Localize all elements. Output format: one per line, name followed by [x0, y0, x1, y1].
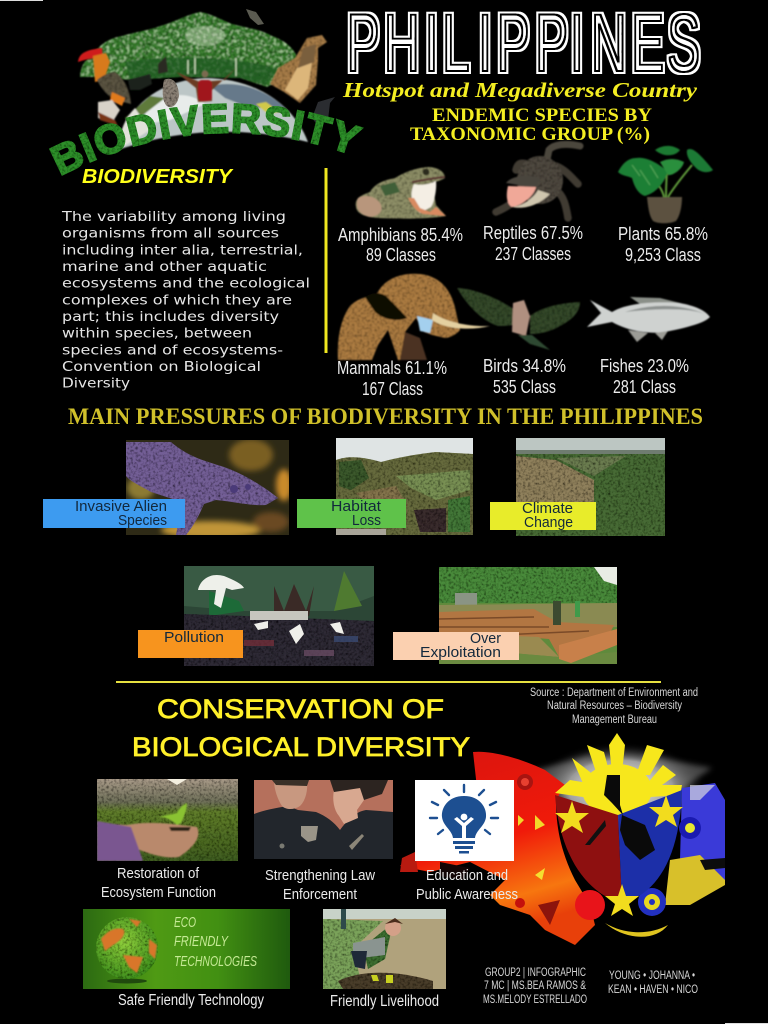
heading: biodiversity: BIODIVERSITY	[82, 165, 234, 188]
label: 89 Classes	[366, 245, 436, 265]
species: birds	[457, 288, 580, 397]
label: safe friendly technology: Safe Friendly Technology	[118, 992, 264, 1009]
stars	[555, 801, 589, 833]
globe	[118, 78, 308, 150]
label: 237 Classes	[495, 244, 571, 264]
icon: crocodile	[496, 144, 580, 218]
eco text	[174, 915, 257, 970]
label: education and public awareness: Public Awareness	[416, 886, 518, 903]
label: habitat loss	[297, 498, 406, 529]
curved green wordmark: BIODIVERSITY	[49, 103, 364, 176]
sun rays	[555, 733, 682, 798]
label: 281 Class	[613, 377, 676, 397]
subtitle: Hotspot and Megadiverse Country	[342, 78, 698, 102]
red splash wing	[400, 752, 595, 945]
text block: definition: part; this includes diversity	[62, 309, 279, 325]
heading: conservation: BIOLOGICAL DIVERSITY	[132, 732, 470, 762]
illustration: biodiversity tree and globe collage	[49, 9, 364, 176]
label	[600, 356, 689, 397]
label: climate change: Climate	[522, 500, 573, 517]
eagle	[270, 35, 327, 103]
globe	[96, 917, 158, 984]
credits: group: GROUP2 | INFOGRAPHIC	[485, 967, 586, 979]
small flying bird	[246, 9, 264, 25]
heading: conservation: CONSERVATION OF	[157, 694, 444, 724]
species: amphibians	[338, 167, 463, 265]
text block: definition: within species, between	[62, 326, 252, 342]
heading: endemic species	[410, 106, 653, 145]
label: over exploitation: Exploitation	[420, 644, 501, 661]
label: Plants 65.8%	[618, 224, 708, 244]
source credit: Management Bureau	[572, 714, 657, 726]
title: PHILIPPINES	[347, 0, 700, 89]
label: habitat loss: Habitat	[331, 498, 382, 515]
credits: members: YOUNG • JOHANNA •	[609, 970, 695, 982]
shield	[555, 795, 622, 903]
icon: light bulb	[430, 785, 498, 854]
label: friendly livelihood: Friendly Livelihood	[330, 993, 439, 1010]
photo: over exploitation	[439, 567, 617, 664]
tree canopy	[80, 12, 297, 87]
photo: invasive alien species	[126, 440, 289, 535]
text block: definition: species and of ecosystems-	[62, 342, 283, 358]
label: invasive alien species: Species	[118, 512, 167, 529]
species: mammals	[337, 274, 490, 399]
hornbill	[78, 48, 152, 126]
photo: habitat loss	[336, 438, 473, 535]
label: pollution	[138, 629, 243, 658]
icon: elephant	[338, 274, 490, 360]
label: 167 Class	[362, 379, 423, 399]
photo: restoration of ecosystem	[97, 779, 238, 861]
icon: frog	[356, 167, 446, 219]
text block: definition: complexes of which they are	[62, 292, 292, 308]
label: 9,253 Class	[625, 245, 701, 265]
credits: group: 7 MC | MS.BEA RAMOS &	[484, 980, 586, 992]
horizontal divider	[116, 681, 661, 683]
label: Fishes 23.0%	[600, 356, 689, 376]
label	[483, 223, 583, 264]
hiker	[176, 68, 236, 102]
eco text: FRIENDLY	[174, 934, 229, 950]
text block: definition	[61, 209, 310, 392]
emblem: philippine sun and shield with splash	[400, 733, 725, 945]
label	[337, 358, 447, 399]
label: Reptiles 67.5%	[483, 223, 583, 243]
label: climate change	[490, 500, 596, 531]
heading: main pressures: MAIN PRESSURES OF BIODIVERSITY IN THE PHILIPPINES	[68, 404, 703, 429]
credits: group	[483, 967, 587, 1006]
icon: fish	[587, 297, 710, 342]
label: over exploitation	[393, 630, 519, 661]
heading: endemic species: ENDEMIC SPECIES BY	[432, 106, 653, 126]
label	[483, 356, 566, 397]
yellow vertical divider	[324, 168, 328, 353]
label: Birds 34.8%	[483, 356, 566, 376]
heading: conservation	[132, 694, 470, 762]
text block: definition: The variability among living	[61, 209, 286, 225]
label: education and public awareness	[416, 867, 518, 903]
credits: group: MS.MELODY ESTRELLADO	[483, 994, 587, 1006]
label: strengthening law enforcement: Enforcement	[283, 886, 358, 903]
text block: definition: including inter alia, terrestrial,	[62, 242, 303, 258]
label: over exploitation: Over	[470, 630, 501, 647]
label: 535 Class	[493, 377, 556, 397]
label: invasive alien species	[43, 498, 185, 529]
credits: members	[608, 970, 698, 996]
panel: education icon card	[415, 780, 514, 861]
text block: definition: organisms from all sources	[62, 226, 279, 242]
source credit	[530, 687, 698, 726]
heading: endemic species: TAXONOMIC GROUP (%)	[410, 125, 650, 145]
photo: eco friendly technologies	[83, 909, 290, 989]
label: strengthening law enforcement: Strengthening Law	[265, 867, 375, 884]
species: plants	[618, 146, 713, 265]
photo: friendly livelihood	[323, 909, 446, 989]
map of islands	[604, 775, 623, 815]
photo: law enforcement	[254, 780, 393, 859]
glow rays	[532, 742, 712, 834]
text block: definition: marine and other aquatic	[62, 259, 267, 275]
source credit: Source : Department of Environment and	[530, 687, 698, 699]
text block: definition: ecosystems and the ecological	[62, 276, 310, 292]
blue splash	[575, 783, 725, 937]
label: education and public awareness: Education and	[426, 867, 508, 884]
small perched bird	[312, 97, 335, 126]
photo: pollution	[184, 566, 374, 666]
eco text: ECO	[174, 915, 196, 931]
icon: potted plant	[618, 146, 713, 223]
owl	[163, 79, 179, 107]
label: climate change: Change	[524, 514, 573, 531]
text block: definition: Diversity	[62, 376, 130, 392]
label: strengthening law enforcement	[265, 867, 375, 903]
species: reptiles	[483, 144, 583, 264]
label	[338, 225, 463, 265]
source credit: Natural Resources – Biodiversity	[547, 700, 682, 712]
label: restoration of ecosystem function: Ecosystem Function	[101, 884, 216, 901]
label: invasive alien species: Invasive Alien	[75, 498, 167, 515]
photo: climate change	[516, 438, 665, 536]
label: Mammals 61.1%	[337, 358, 447, 378]
label: habitat loss: Loss	[352, 512, 381, 529]
species: fishes	[587, 297, 710, 397]
credits: members: KEAN • HAVEN • NICO	[608, 984, 698, 996]
label: restoration of ecosystem function: Restoration of	[117, 865, 200, 882]
label: pollution: Pollution	[164, 629, 224, 646]
eco text: TECHNOLOGIES	[174, 954, 257, 970]
label: Amphibians 85.4%	[338, 225, 463, 245]
label: restoration of ecosystem function	[101, 865, 216, 901]
text block: definition: Convention on Biological	[62, 359, 261, 375]
icon: bird	[457, 288, 580, 350]
label	[618, 224, 708, 265]
